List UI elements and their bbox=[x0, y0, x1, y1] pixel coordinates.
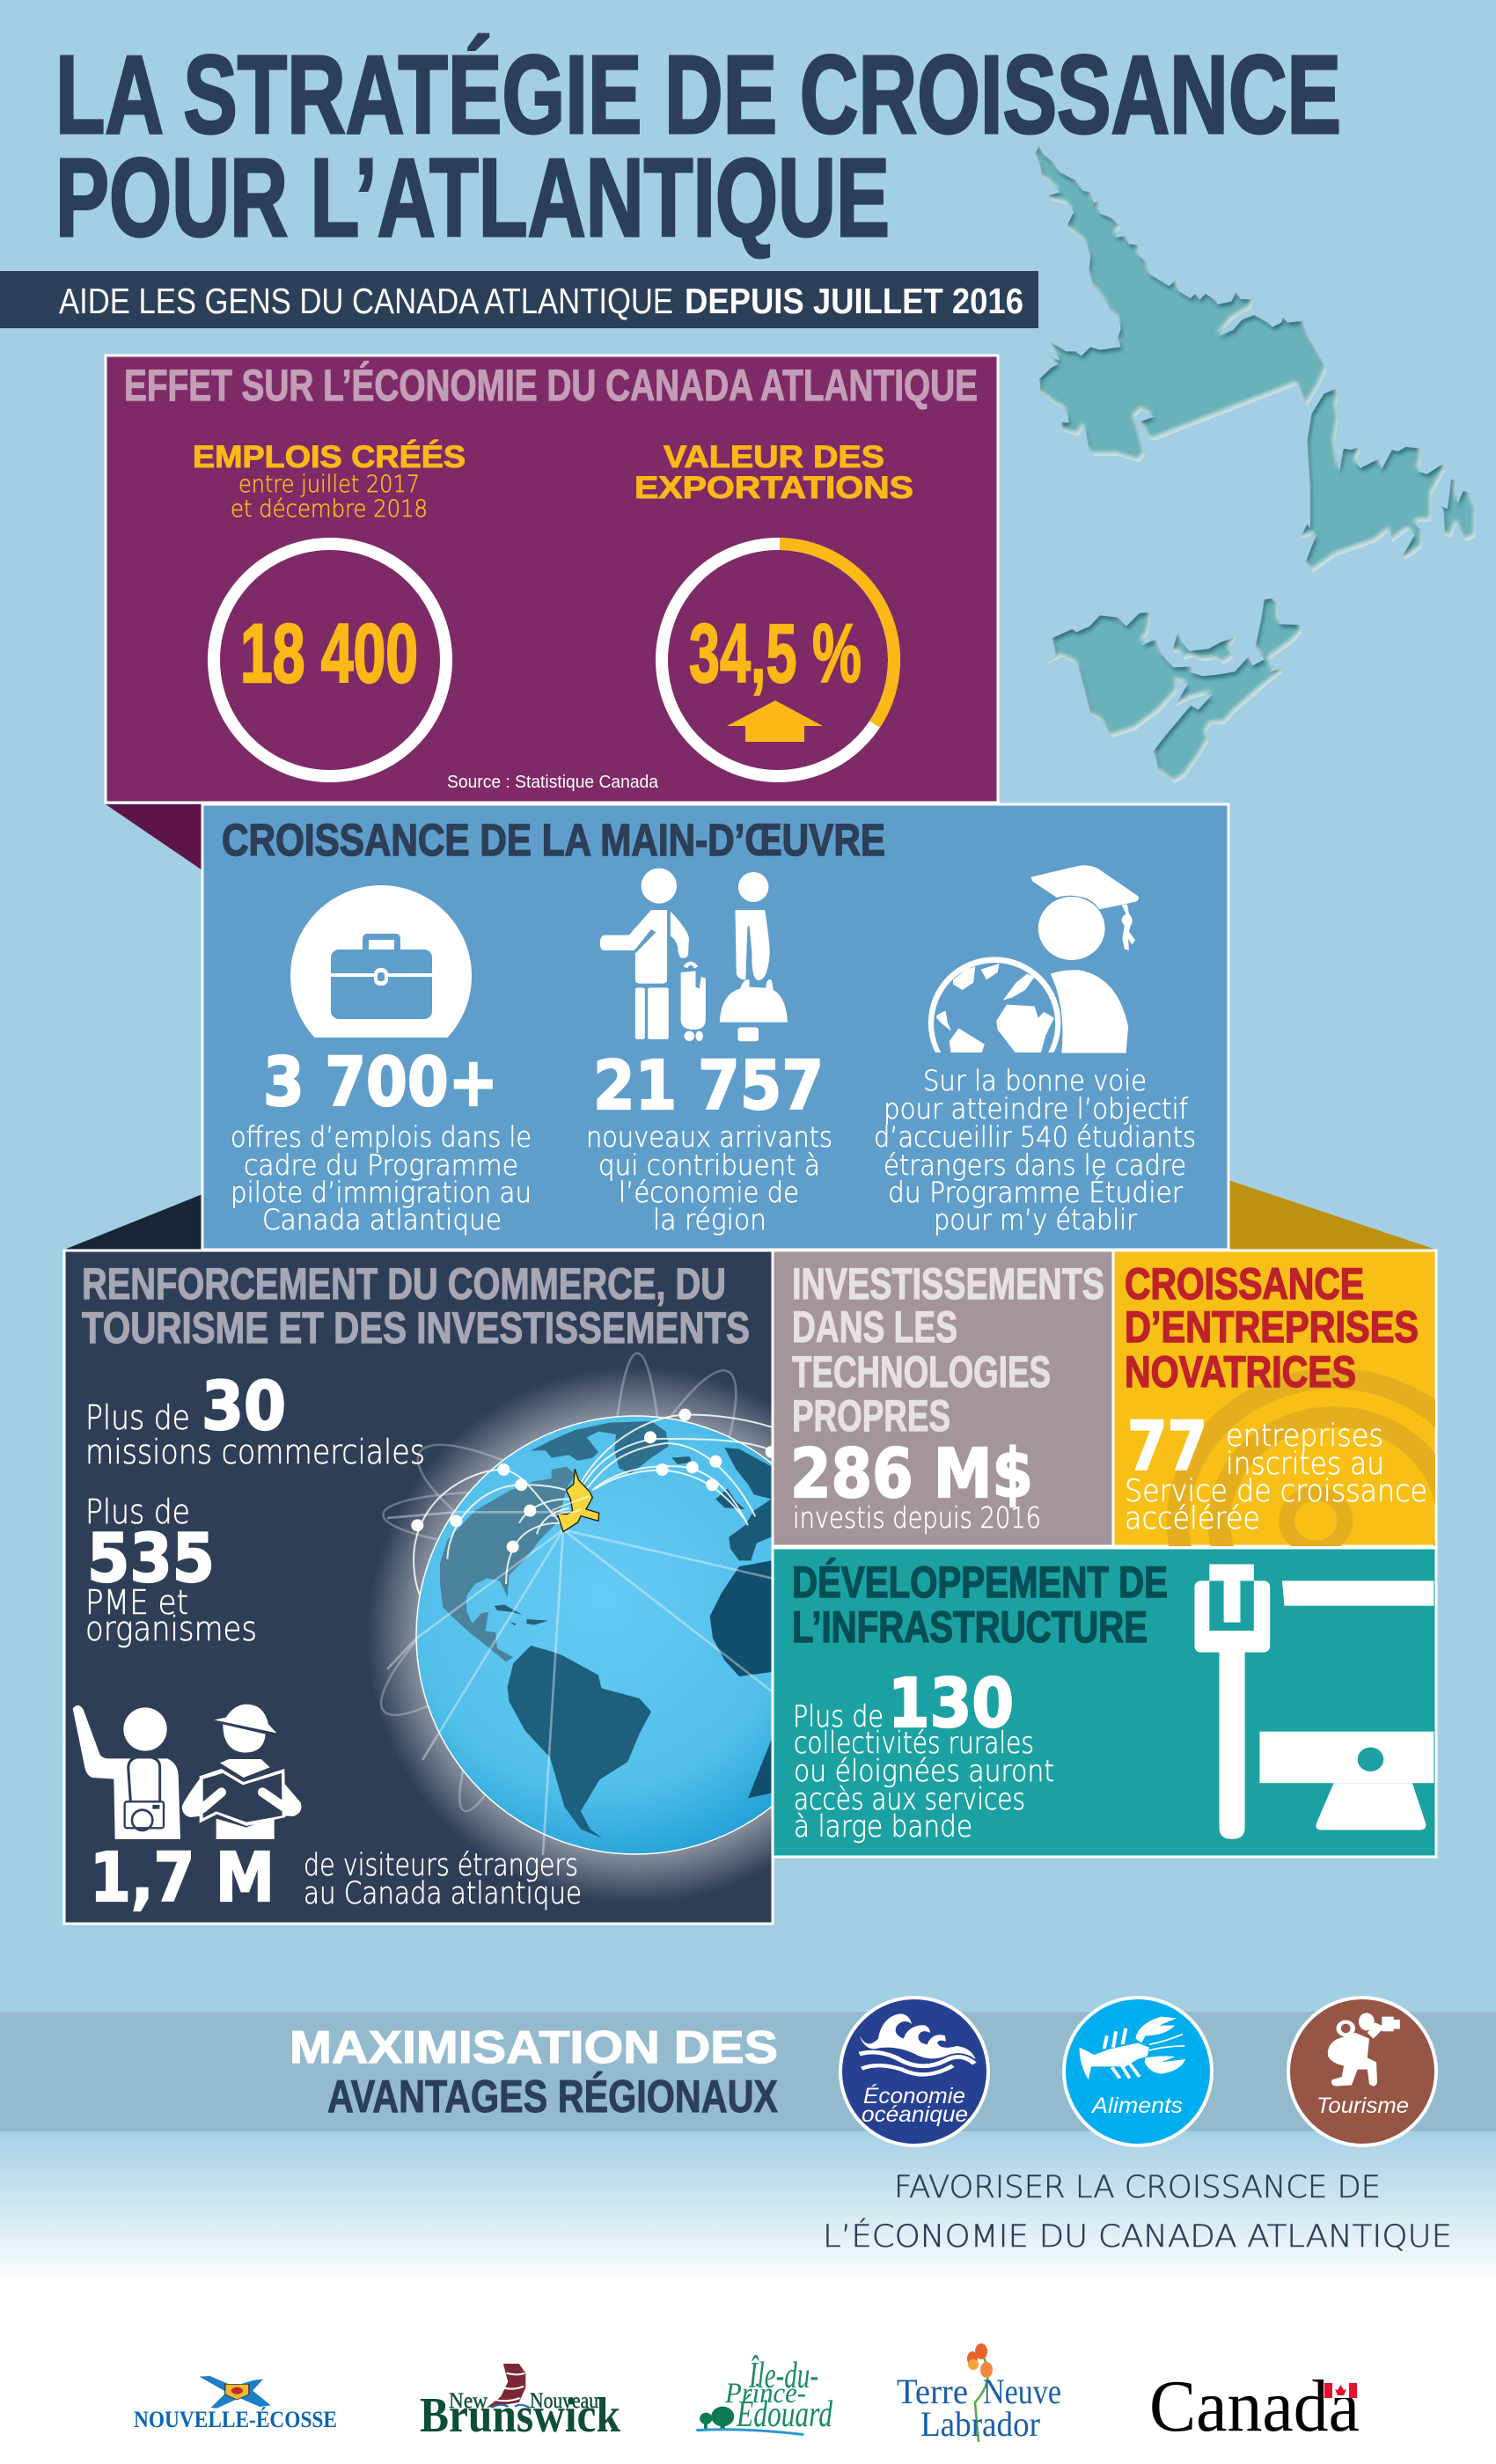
heading: innovative business: CROISSANCE bbox=[1125, 1259, 1364, 1309]
panel: innovative business growth bbox=[1114, 1250, 1438, 1547]
heading: innovative business: NOVATRICES bbox=[1125, 1347, 1356, 1397]
heading: innovative business bbox=[1125, 1259, 1419, 1397]
ring: 34,5 % exports: 34,5 % bbox=[689, 607, 862, 700]
jobs created label: et décembre 2018 bbox=[231, 495, 428, 523]
stat: newcomers: l’économie de bbox=[619, 1176, 799, 1209]
icon: tourism: Tourisme bbox=[1316, 2094, 1409, 2118]
stat: 77 companies bbox=[1125, 1408, 1427, 1536]
subtitle bar bbox=[0, 271, 1038, 328]
ring: 18 400 jobs: 18 400 bbox=[240, 607, 418, 700]
panel: economic effect bbox=[106, 356, 998, 803]
stat: job offers: cadre du Programme bbox=[244, 1148, 518, 1182]
icon: ocean economy: océanique bbox=[862, 2102, 968, 2127]
stat: foreign visitors bbox=[90, 1839, 582, 1918]
subtitle bar: DEPUIS JUILLET 2016 bbox=[685, 281, 1023, 321]
icon: newcomers bbox=[600, 869, 788, 1041]
logo: Nova Scotia bbox=[134, 2376, 337, 2432]
heading: trade, tourism and investment: TOURISME ET DES INVESTISSEMENTS bbox=[82, 1303, 750, 1353]
stat: 77 companies: entreprises bbox=[1226, 1419, 1383, 1454]
stat: SMEs and organizations: Plus de bbox=[85, 1492, 190, 1531]
connector triangle: purple bbox=[106, 804, 202, 870]
stat: newcomers: nouveaux arrivants bbox=[586, 1120, 832, 1154]
heading: innovative business: D’ENTREPRISES bbox=[1125, 1302, 1419, 1352]
tagline: FAVORISER LA CROISSANCE DE bbox=[894, 2170, 1381, 2205]
logo: Prince Edward Island: Prince- bbox=[724, 2378, 806, 2409]
text: international students: du Programme Étudier bbox=[888, 1176, 1184, 1209]
stat: 130 communities: collectivités rurales bbox=[794, 1726, 1034, 1761]
heading: clean technology: DANS LES bbox=[792, 1302, 957, 1352]
logo: Newfoundland and Labrador: Labrador bbox=[920, 2404, 1040, 2444]
title bbox=[55, 33, 1341, 260]
text: international students: étrangers dans le cadre bbox=[884, 1148, 1186, 1182]
ring: 34,5 % exports bbox=[662, 544, 894, 776]
stat: 130 communities: ou éloignées auront bbox=[794, 1754, 1054, 1789]
connector triangle: gold bbox=[1228, 1180, 1436, 1250]
stat: 77 companies: accélérée bbox=[1125, 1501, 1260, 1536]
panel: infrastructure development bbox=[773, 1548, 1436, 1857]
logo: New Brunswick: New bbox=[449, 2389, 488, 2413]
heading: infrastructure: L’INFRASTRUCTURE bbox=[792, 1602, 1148, 1652]
stat: SMEs and organizations bbox=[85, 1492, 257, 1648]
heading: clean technology bbox=[792, 1259, 1104, 1441]
map: Atlantic provinces bbox=[1036, 146, 1476, 783]
logo: New Brunswick: Nouveau bbox=[530, 2389, 598, 2413]
stat: 77 companies: inscrites au bbox=[1226, 1447, 1384, 1482]
stat: 130 communities: Plus de bbox=[793, 1699, 884, 1734]
logo: Newfoundland and Labrador: Neuve bbox=[983, 2372, 1061, 2411]
panel: clean technology investment bbox=[773, 1250, 1113, 1546]
panel: trade, tourism and investment bbox=[64, 1250, 904, 1924]
icon: graduate and globe bbox=[928, 865, 1139, 1053]
stat: foreign visitors: 1,7 M bbox=[90, 1839, 275, 1918]
title: POUR L’ATLANTIQUE bbox=[55, 136, 890, 260]
globe illustration bbox=[371, 1352, 771, 1899]
text: international students bbox=[874, 1064, 1196, 1236]
jobs created label: EMPLOIS CRÉÉS bbox=[193, 439, 466, 474]
stat: trade missions bbox=[85, 1367, 425, 1471]
stat: trade missions: missions commerciales bbox=[85, 1433, 425, 1471]
stat: 286 M$: 286 M$ bbox=[790, 1435, 1033, 1514]
icon: up arrow bbox=[727, 700, 823, 742]
text: international students: pour atteindre l’objectif bbox=[884, 1092, 1189, 1126]
icon: ocean economy: Économie bbox=[863, 2083, 965, 2108]
icon: tourism bbox=[1288, 1998, 1436, 2145]
text: international students: d’accueillir 540 étudiants bbox=[874, 1120, 1196, 1154]
icon: briefcase bbox=[290, 885, 472, 1038]
heading: infrastructure bbox=[792, 1558, 1168, 1652]
stat: job offers bbox=[231, 1044, 532, 1236]
stat: job offers: 3 700+ bbox=[263, 1044, 498, 1122]
logo: Canada wordmark: Canada bbox=[1149, 2365, 1360, 2447]
stat: 130 communities bbox=[793, 1665, 1054, 1844]
text: international students: pour m’y établir bbox=[934, 1203, 1138, 1236]
banner: maximizing regional advantages: AVANTAGES RÉGIONAUX bbox=[327, 2072, 778, 2123]
logo: New Brunswick bbox=[420, 2364, 621, 2443]
stat: SMEs and organizations: 535 bbox=[87, 1519, 215, 1597]
stat: newcomers: 21 757 bbox=[593, 1047, 824, 1126]
export value label: VALEUR DES bbox=[664, 440, 884, 474]
subtitle bar: AIDE LES GENS DU CANADA ATLANTIQUE bbox=[59, 281, 673, 321]
heading: economic effect: EFFET SUR L’ÉCONOMIE DU CANADA ATLANTIQUE bbox=[124, 361, 978, 410]
stat: 130 communities: à large bande bbox=[794, 1809, 972, 1844]
tagline bbox=[823, 2170, 1452, 2255]
heading: clean technology: TECHNOLOGIES bbox=[792, 1347, 1051, 1397]
logo: Nova Scotia: NOUVELLE-ÉCOSSE bbox=[134, 2407, 337, 2432]
stat: job offers: offres d’emplois dans le bbox=[231, 1120, 532, 1154]
stat: job offers: Canada atlantique bbox=[262, 1203, 502, 1236]
logo: Prince Edward Island: Édouard bbox=[736, 2394, 833, 2435]
stat: newcomers: qui contribuent à bbox=[598, 1148, 820, 1182]
stat: 130 communities: accès aux services bbox=[794, 1782, 1025, 1817]
logo: Prince Edward Island bbox=[696, 2355, 833, 2435]
icon: broadband cable connector bbox=[1194, 1565, 1434, 1839]
icon: tourists bbox=[73, 1705, 301, 1839]
jobs created label: entre juillet 2017 bbox=[238, 471, 420, 498]
heading: clean technology: INVESTISSEMENTS bbox=[792, 1259, 1104, 1309]
heading: workforce growth: CROISSANCE DE LA MAIN-D’ŒUVRE bbox=[222, 815, 885, 865]
stat: 286 M$: investis depuis 2016 bbox=[793, 1500, 1041, 1535]
banner: maximizing regional advantages: MAXIMISATION DES bbox=[290, 2022, 778, 2073]
export value label: EXPORTATIONS bbox=[634, 471, 913, 505]
source note: Source : Statistique Canada bbox=[447, 773, 659, 792]
logo: Newfoundland and Labrador: Terre bbox=[897, 2372, 968, 2411]
stat: 77 companies: Service de croissance bbox=[1125, 1474, 1427, 1509]
stat: newcomers bbox=[586, 1047, 832, 1236]
icon: ocean economy bbox=[840, 1998, 988, 2145]
heading: infrastructure: DÉVELOPPEMENT DE bbox=[792, 1558, 1168, 1607]
jobs created label bbox=[193, 439, 466, 523]
text: international students: Sur la bonne voie bbox=[923, 1064, 1147, 1097]
export value label bbox=[634, 440, 913, 505]
heading: trade, tourism and investment bbox=[82, 1259, 750, 1353]
logo: Newfoundland and Labrador bbox=[897, 2343, 1061, 2444]
stat: 130 communities: 130 bbox=[888, 1665, 1014, 1743]
stat: trade missions: 30 bbox=[202, 1367, 286, 1445]
stat: trade missions: Plus de bbox=[85, 1398, 190, 1437]
stat: SMEs and organizations: organismes bbox=[85, 1610, 257, 1648]
stat: newcomers: la région bbox=[653, 1203, 766, 1236]
ring: 18 400 jobs bbox=[214, 544, 446, 776]
stat: SMEs and organizations: PME et bbox=[85, 1583, 188, 1622]
icon: food bbox=[1064, 1998, 1212, 2145]
stat: foreign visitors: au Canada atlantique bbox=[304, 1876, 582, 1911]
logo: New Brunswick: Brunswick bbox=[420, 2388, 621, 2443]
tagline: L’ÉCONOMIE DU CANADA ATLANTIQUE bbox=[823, 2218, 1452, 2255]
decorative target rings bbox=[1167, 1368, 1435, 1546]
heading: trade, tourism and investment: RENFORCEMENT DU COMMERCE, DU bbox=[82, 1259, 726, 1309]
logo: Prince Edward Island: Île-du- bbox=[748, 2355, 818, 2396]
panel: workforce growth bbox=[202, 804, 1228, 1250]
stat: foreign visitors: de visiteurs étrangers bbox=[304, 1848, 578, 1883]
stat: job offers: pilote d’immigration au bbox=[231, 1176, 532, 1209]
banner: maximizing regional advantages bbox=[0, 2012, 1496, 2131]
connector triangle: navy bbox=[64, 1194, 202, 1250]
heading: clean technology: PROPRES bbox=[792, 1391, 950, 1441]
stat: 77 companies: 77 bbox=[1127, 1408, 1207, 1486]
icon: food: Aliments bbox=[1090, 2094, 1183, 2118]
